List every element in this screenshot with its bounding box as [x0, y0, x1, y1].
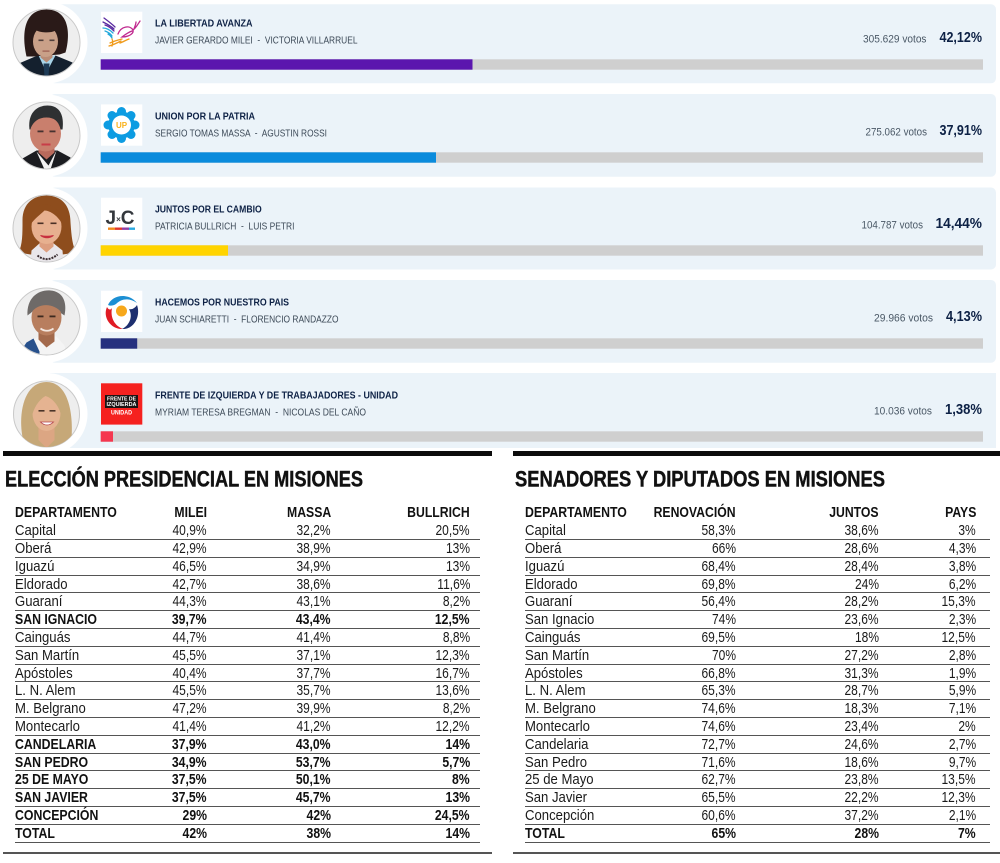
party name: HACEMOS POR NUESTRO PAIS — [155, 297, 289, 309]
table: presidential results by department: SAN PEDRO — [15, 754, 88, 771]
percentage: 14,44% — [936, 216, 982, 232]
candidates: JUAN SCHIARETTI - FLORENCIO RANDAZZO — [155, 314, 338, 326]
table: senators and deputies results by department: 28,2% — [845, 593, 879, 610]
table: senators and deputies results by department: 58,3% — [702, 522, 736, 539]
table: presidential results by department: 13,6% — [436, 682, 470, 699]
table: senators and deputies results by department: 38,6% — [845, 522, 879, 539]
percentage: 42,12% — [940, 30, 982, 46]
results panels — [12, 4, 996, 448]
panel: Juntos por el Cambio — [6, 188, 996, 270]
portrait: Bullrich — [6, 188, 88, 270]
percentage: 4,13% — [946, 309, 982, 325]
table: senators and deputies results by department: 13,5% — [942, 771, 976, 788]
logo: Frente de Izquierda: FRENTE DE — [107, 396, 137, 402]
table: presidential results by department: 43,0% — [296, 736, 331, 753]
bar — [101, 59, 983, 70]
table: senators and deputies results by department: L. N. Alem — [525, 682, 586, 699]
logo: Union por la Patria — [101, 104, 142, 146]
table header: DEPARTAMENTO — [525, 504, 627, 521]
table: senators and deputies results by department: M. Belgrano — [525, 700, 596, 717]
table: presidential results by department: 41,2% — [297, 718, 331, 735]
table: senators and deputies results by department: 71,6% — [702, 754, 736, 771]
logo: Juntos por el Cambio: × — [116, 215, 121, 224]
table: senators and deputies results by department: 66% — [712, 540, 736, 557]
table: senators and deputies results by department: 2,3% — [949, 611, 976, 628]
party name: LA LIBERTAD AVANZA — [155, 18, 253, 30]
table: presidential results by department: 50,1% — [296, 771, 331, 788]
table: presidential results by department: Iguazú — [15, 558, 54, 575]
panel: Hacemos por Nuestro Pais — [6, 280, 996, 363]
table: presidential results by department: 20,5% — [436, 522, 470, 539]
table: senators and deputies results by department: 68,4% — [702, 558, 736, 575]
table: presidential results by department: 8,2% — [443, 700, 470, 717]
table: presidential results by department: 46,5% — [173, 558, 207, 575]
table: presidential results by department: 14% — [446, 736, 470, 753]
table header: BULLRICH — [408, 504, 470, 521]
logo: Hacemos por Nuestro Pais — [101, 291, 142, 332]
percentage: 1,38% — [945, 402, 982, 418]
total row: 42% — [183, 825, 207, 842]
heading: senators and deputies: SENADORES Y DIPUTADOS EN MISIONES — [515, 466, 885, 492]
table: presidential results by department: 35,7% — [297, 682, 331, 699]
candidates: JAVIER GERARDO MILEI - VICTORIA VILLARRUEL — [155, 34, 358, 46]
votes: 29.966 votos — [874, 313, 933, 325]
table: senators and deputies results by department: 3% — [959, 522, 976, 539]
table header: PAYS — [945, 504, 976, 521]
table: presidential results by department: 5,7% — [442, 754, 470, 771]
table: presidential results by department: SAN IGNACIO — [15, 611, 97, 628]
table: senators and deputies results by department: 27,2% — [845, 647, 879, 664]
table: senators and deputies results by department: 18% — [855, 629, 879, 646]
bottom rule right — [513, 852, 1000, 854]
table: senators and deputies results by department: 69,8% — [702, 576, 736, 593]
total row: TOTAL — [525, 825, 565, 842]
portrait: Milei — [12, 4, 88, 83]
table: senators and deputies results by department: 65,3% — [702, 682, 736, 699]
logo: La Libertad Avanza — [101, 12, 142, 53]
table: presidential results by department: Oberá — [15, 540, 51, 557]
portrait: Massa — [6, 94, 88, 176]
percentage: 37,91% — [940, 123, 982, 139]
table: presidential results by department: 8,2% — [443, 593, 470, 610]
heading rule left — [3, 451, 492, 456]
table: senators and deputies results by department: 24% — [855, 576, 879, 593]
table: senators and deputies results by department: Capital — [525, 522, 566, 539]
portrait: Schiaretti — [6, 280, 88, 362]
votes: 10.036 votos — [874, 406, 932, 418]
total row: 28% — [855, 825, 879, 842]
total row: 65% — [712, 825, 736, 842]
table: senators and deputies results by department: 2,8% — [949, 647, 976, 664]
table: senators and deputies results by department: San Ignacio — [525, 611, 594, 628]
table: presidential results by department: M. Belgrano — [15, 700, 86, 717]
table: senators and deputies results by department: Iguazú — [525, 558, 564, 575]
table: senators and deputies results by department: 4,3% — [949, 540, 976, 557]
table: presidential results by department: 12,3% — [436, 647, 470, 664]
party name: FRENTE DE IZQUIERDA Y DE TRABAJADORES - UNIDAD — [155, 390, 398, 402]
candidates: PATRICIA BULLRICH - LUIS PETRI — [155, 220, 294, 232]
candidates: MYRIAM TERESA BREGMAN - NICOLAS DEL CAÑO — [155, 406, 366, 418]
table: senators and deputies results by department: 28,7% — [845, 682, 879, 699]
table: presidential results by department: L. N. Alem — [15, 682, 76, 699]
total row: 38% — [307, 825, 331, 842]
table: senators and deputies results by department: 31,3% — [845, 665, 879, 682]
table: senators and deputies results by department: San Pedro — [525, 754, 587, 771]
table: presidential results by department: SAN JAVIER — [15, 789, 88, 806]
table: senators and deputies results by department: 18,6% — [845, 754, 879, 771]
total row — [525, 825, 990, 843]
table: senators and deputies results by department: 69,5% — [702, 629, 736, 646]
table: presidential results by department: 53,7% — [296, 754, 331, 771]
table: presidential results by department: 47,2% — [173, 700, 207, 717]
table header: JUNTOS — [830, 504, 879, 521]
panel: Frente de Izquierda — [6, 373, 996, 455]
table: presidential results by department: 45,5% — [173, 647, 207, 664]
total row: TOTAL — [15, 825, 55, 842]
bar — [101, 152, 983, 163]
table: presidential results by department: 42,9% — [173, 540, 207, 557]
logo: Frente de Izquierda: UNIDAD — [111, 410, 133, 416]
table: senators and deputies results by department: 62,7% — [702, 771, 736, 788]
candidates: SERGIO TOMAS MASSA - AGUSTIN ROSSI — [155, 128, 327, 140]
table: senators and deputies results by department: Cainguás — [525, 629, 580, 646]
table: presidential results by department: Apóstoles — [15, 665, 73, 682]
table: presidential results by department: 41,4% — [173, 718, 207, 735]
heading: presidential election: ELECCIÓN PRESIDENCIAL EN MISIONES — [5, 466, 363, 492]
logo: Frente de Izquierda: IZQUIERDA — [106, 402, 137, 408]
table: presidential results by department: 25 DE MAYO — [15, 771, 88, 788]
heading rule right — [513, 451, 1000, 456]
table: senators and deputies results by department: 70% — [712, 647, 736, 664]
table: presidential results by department: 45,7% — [296, 789, 331, 806]
table: senators and deputies results by department: 25 de Mayo — [525, 771, 594, 788]
table: senators and deputies results by department: 23,6% — [845, 611, 879, 628]
table: senators and deputies results by department: 18,3% — [845, 700, 879, 717]
table: presidential results by department: 37,5% — [172, 771, 207, 788]
table: senators and deputies results by department: 23,8% — [845, 771, 879, 788]
table: senators and deputies results by department: 66,8% — [702, 665, 736, 682]
votes: 305.629 votos — [863, 34, 927, 46]
table header: MILEI — [174, 504, 207, 521]
table: senators and deputies results by department: Oberá — [525, 540, 561, 557]
table: presidential results by department: CANDELARIA — [15, 736, 96, 753]
table: senators and deputies results by department: 2,7% — [949, 736, 976, 753]
table: presidential results by department: 16,7% — [436, 665, 470, 682]
table: presidential results by department: Montecarlo — [15, 718, 80, 735]
table: senators and deputies results by department: 3,8% — [949, 558, 976, 575]
table header: MASSA — [287, 504, 331, 521]
table: presidential results by department: 40,4% — [173, 665, 207, 682]
total row: 7% — [958, 825, 976, 842]
logo: Juntos por el Cambio: C — [121, 208, 135, 229]
table: presidential results by department: 38,6% — [297, 576, 331, 593]
panel: Union por la Patria — [6, 94, 996, 177]
bar — [101, 245, 983, 256]
table: presidential results by department: 13% — [446, 558, 470, 575]
logo: Union por la Patria: UP — [116, 121, 128, 130]
table: senators and deputies results by department: Eldorado — [525, 576, 578, 593]
table: senators and deputies results by department: 12,5% — [942, 629, 976, 646]
table: presidential results by department: 13% — [446, 540, 470, 557]
table: presidential results by department: 37,9% — [172, 736, 207, 753]
table: presidential results by department: 42% — [307, 807, 331, 824]
table: senators and deputies results by department: 24,6% — [845, 736, 879, 753]
table: senators and deputies results by department: 72,7% — [702, 736, 736, 753]
table: senators and deputies results by department: 74% — [712, 611, 736, 628]
total row — [15, 825, 480, 843]
table: presidential results by department: Capital — [15, 522, 56, 539]
table: senators and deputies results by department: 60,6% — [702, 807, 736, 824]
table: senators and deputies results by department: 74,6% — [702, 700, 736, 717]
table: senators and deputies results by department: 56,4% — [702, 593, 736, 610]
table: senators and deputies results by department: Guaraní — [525, 593, 572, 610]
table: presidential results by department: 44,3% — [173, 593, 207, 610]
table: senators and deputies results by department: 6,2% — [949, 576, 976, 593]
table: presidential results by department: Eldorado — [15, 576, 68, 593]
table: senators and deputies results by department: 37,2% — [845, 807, 879, 824]
table: presidential results by department: 37,7% — [297, 665, 331, 682]
table: senators and deputies results by department: 23,4% — [845, 718, 879, 735]
table: senators and deputies results by department: 65,5% — [702, 789, 736, 806]
table: presidential results by department: Guaraní — [15, 593, 62, 610]
table: presidential results by department: 41,4% — [297, 629, 331, 646]
table: senators and deputies results by department: 15,3% — [942, 593, 976, 610]
portrait: Bregman — [13, 373, 88, 448]
table: presidential results by department: 45,5% — [173, 682, 207, 699]
logo: Juntos por el Cambio — [101, 198, 142, 239]
table: senators and deputies results by department: 28,6% — [845, 540, 879, 557]
table: senators and deputies results by department: Apóstoles — [525, 665, 583, 682]
table: presidential results by department: San Martín — [15, 647, 79, 664]
table: senators and deputies results by department: 5,9% — [949, 682, 976, 699]
table: senators and deputies results by department: San Javier — [525, 789, 587, 806]
table: presidential results by department: 32,2% — [297, 522, 331, 539]
table: senators and deputies results by department: 2% — [959, 718, 976, 735]
table: presidential results by department — [15, 504, 480, 843]
table: presidential results by department: 11,6% — [437, 576, 470, 593]
table header: RENOVACIÓN — [654, 504, 736, 521]
table: presidential results by department: 8,8% — [443, 629, 470, 646]
bottom rule left — [3, 852, 492, 854]
table: senators and deputies results by department: 74,6% — [702, 718, 736, 735]
table: presidential results by department: 34,9% — [297, 558, 331, 575]
table header: DEPARTAMENTO — [15, 504, 117, 521]
table: presidential results by department: 37,1% — [297, 647, 331, 664]
table: presidential results by department: 12,5% — [435, 611, 470, 628]
table: senators and deputies results by department: 2,1% — [949, 807, 976, 824]
table: presidential results by department: 39,9% — [297, 700, 331, 717]
table: presidential results by department: Cainguás — [15, 629, 70, 646]
table: presidential results by department: CONCEPCIÓN — [15, 807, 98, 824]
table: presidential results by department: 43,1% — [297, 593, 331, 610]
table: senators and deputies results by department: Concepción — [525, 807, 594, 824]
table: senators and deputies results by department: 12,3% — [942, 789, 976, 806]
bar — [101, 338, 983, 349]
table: senators and deputies results by department: 28,4% — [845, 558, 879, 575]
logo: Juntos por el Cambio: J — [106, 208, 116, 229]
table: senators and deputies results by department — [525, 504, 990, 843]
table: presidential results by department: 24,5% — [435, 807, 470, 824]
votes: 104.787 votos — [862, 220, 923, 232]
table: presidential results by department: 29% — [183, 807, 207, 824]
table: senators and deputies results by department: 7,1% — [949, 700, 976, 717]
votes: 275.062 votos — [866, 127, 927, 139]
table: senators and deputies results by department: Montecarlo — [525, 718, 590, 735]
party name: UNION POR LA PATRIA — [155, 111, 255, 123]
table: presidential results by department: 34,9% — [172, 754, 207, 771]
table: presidential results by department: 44,7% — [173, 629, 207, 646]
logo: Frente de Izquierda — [101, 383, 142, 425]
table: senators and deputies results by department: 22,2% — [845, 789, 879, 806]
table: presidential results by department: 38,9% — [297, 540, 331, 557]
total row: 14% — [446, 825, 470, 842]
table: senators and deputies results by department: Candelaria — [525, 736, 588, 753]
table: presidential results by department: 42,7% — [173, 576, 207, 593]
table: presidential results by department: 43,4% — [296, 611, 331, 628]
table header — [15, 504, 470, 521]
party name: JUNTOS POR EL CAMBIO — [155, 204, 262, 216]
table: presidential results by department: 37,5% — [172, 789, 207, 806]
table: presidential results by department: 39,7% — [172, 611, 207, 628]
table: senators and deputies results by department: 1,9% — [949, 665, 976, 682]
panel: La Libertad Avanza — [6, 2, 996, 84]
table header — [525, 504, 976, 521]
table: presidential results by department: 40,9% — [173, 522, 207, 539]
table: presidential results by department: 8% — [452, 771, 470, 788]
table: presidential results by department: 13% — [446, 789, 470, 806]
bar — [101, 431, 983, 442]
table: senators and deputies results by department: 9,7% — [949, 754, 976, 771]
table: presidential results by department: 12,2% — [436, 718, 470, 735]
table: senators and deputies results by department: San Martín — [525, 647, 589, 664]
